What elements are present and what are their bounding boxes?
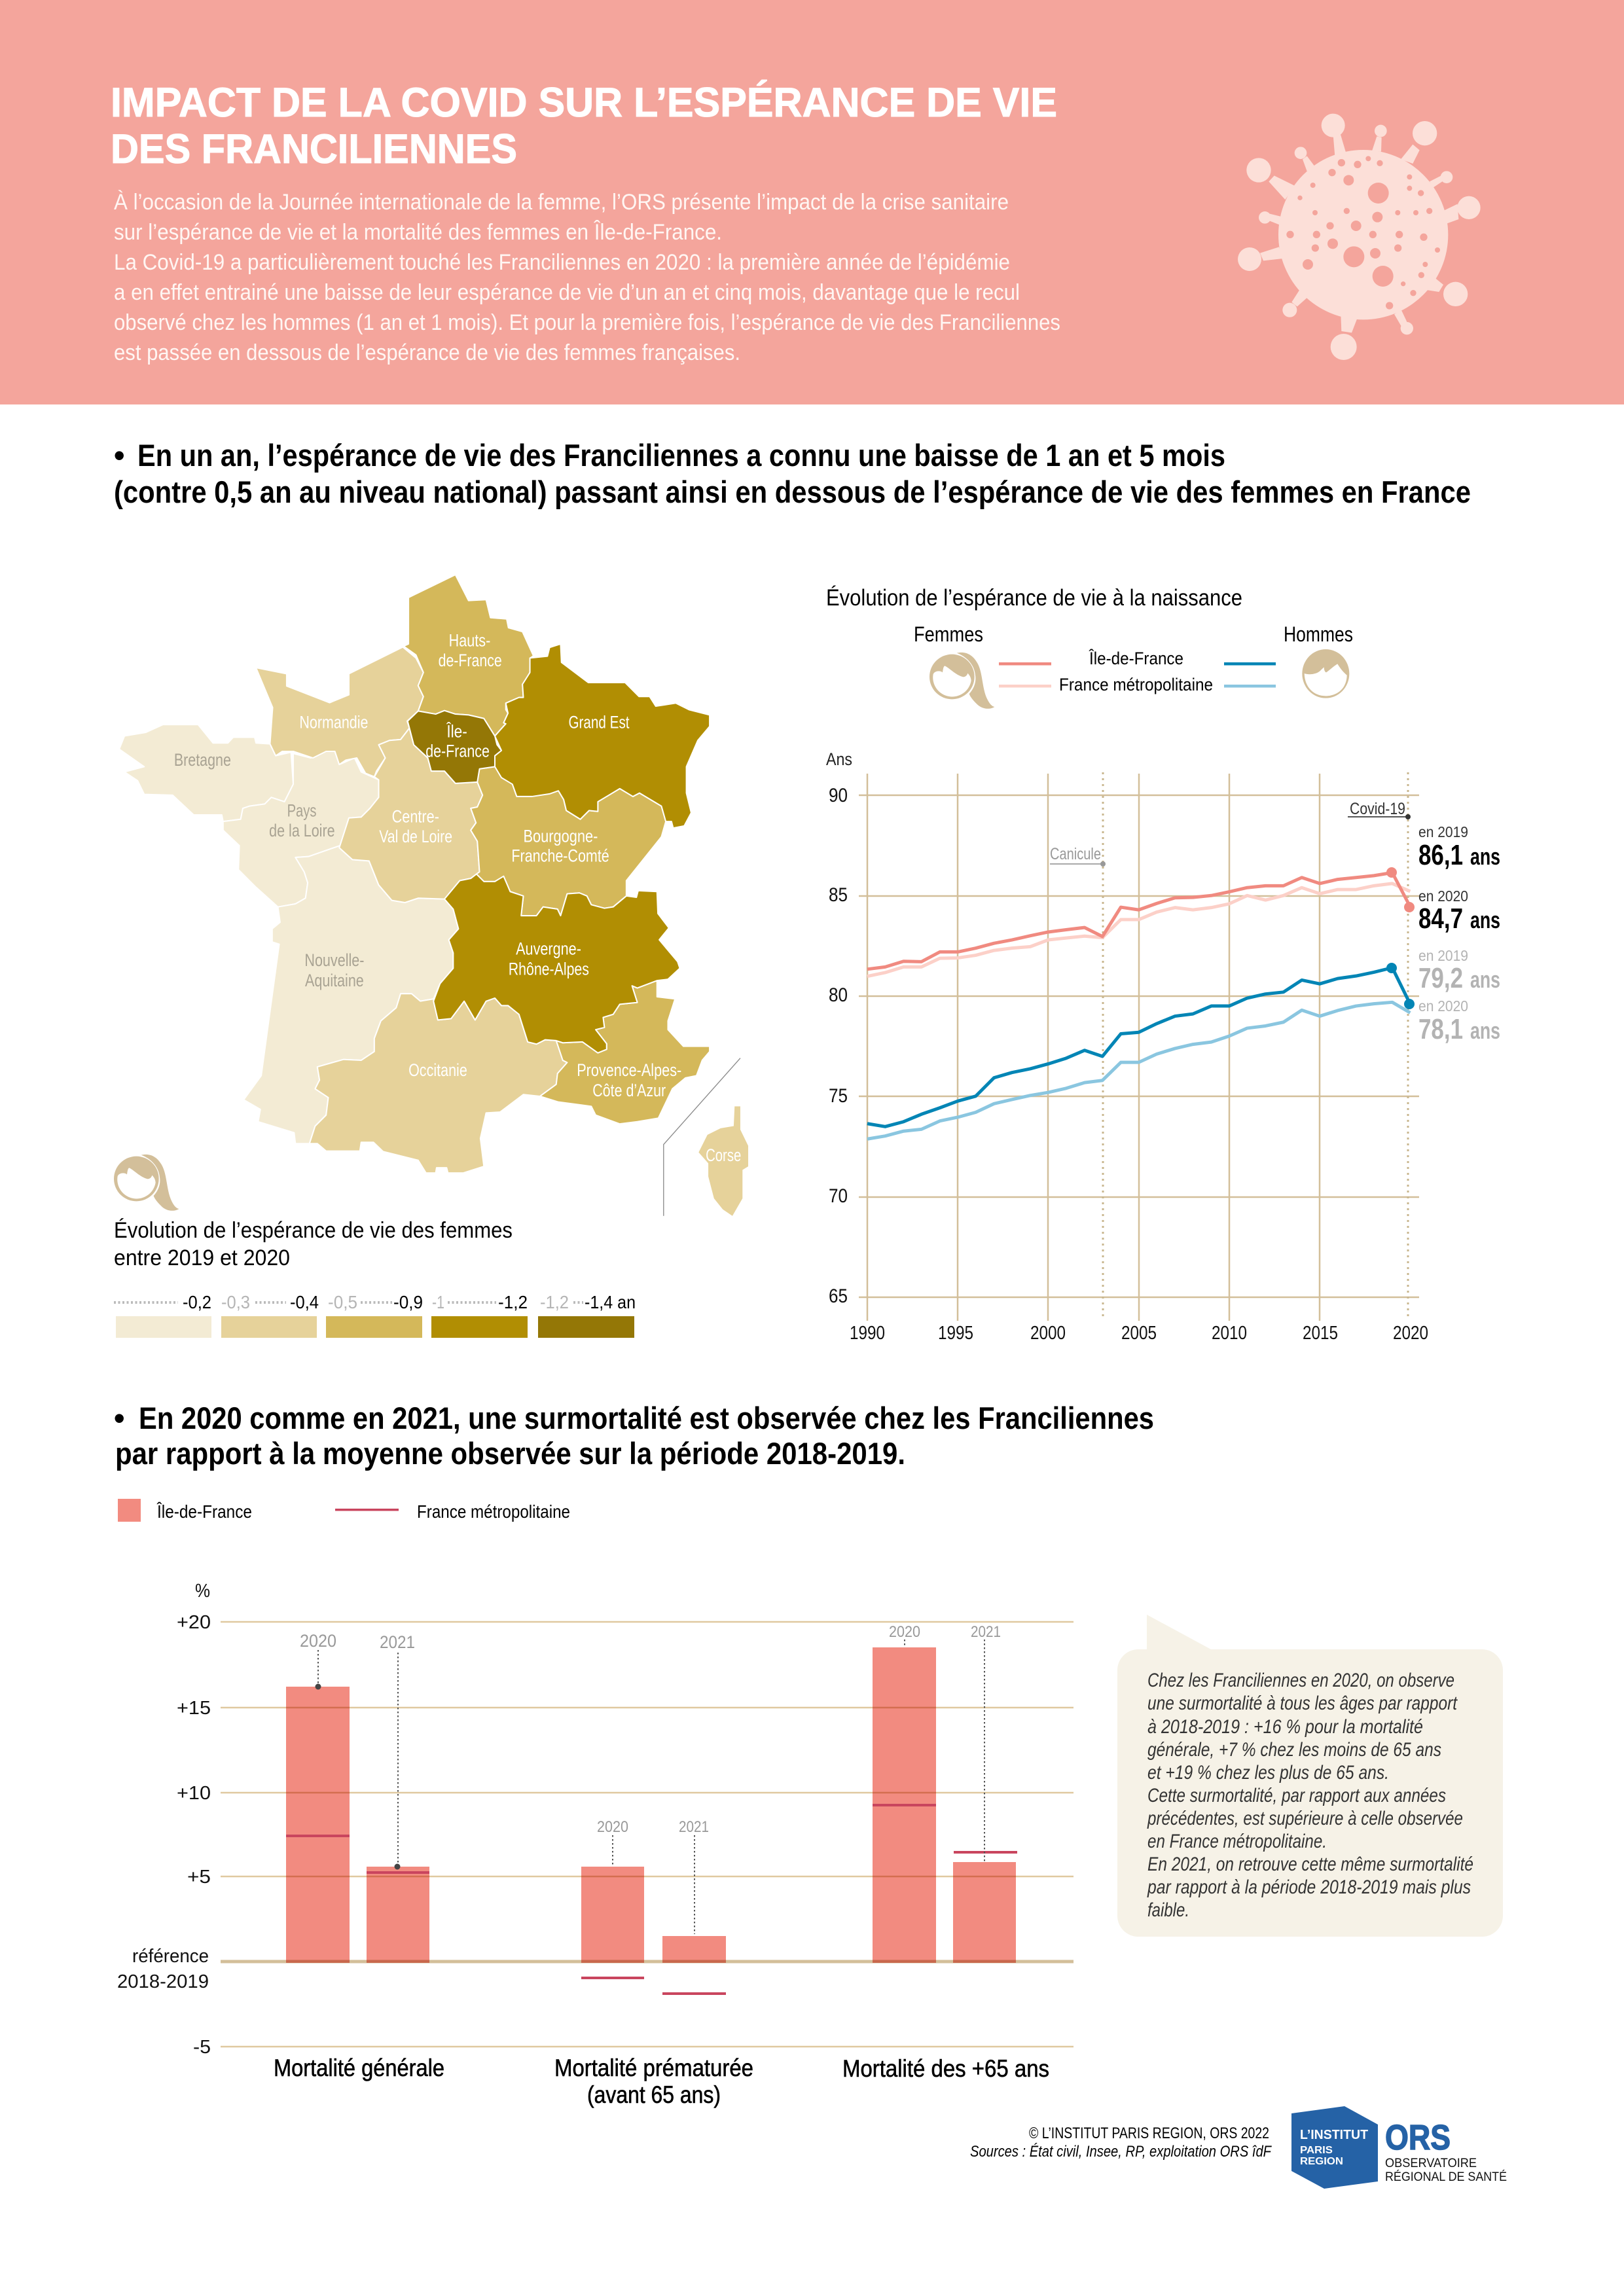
line chart: life expectancy: Ans [826,749,852,769]
callout: commentary: en France métropolitaine. [1147,1831,1327,1852]
category labels: Mortalité des +65 ans [842,2055,1049,2082]
year labels: 2020 [300,1631,336,1651]
legend: line chart: France métropolitaine [1059,675,1213,694]
map: regions of France [119,575,748,1216]
region: Nouvelle-Aquitaine [244,846,458,1143]
axis labels: y: 90 [829,785,848,806]
region: Corse [698,1106,748,1216]
logo: ORS: RÉGIONAL DE SANTÉ [1385,2170,1507,2184]
region labels [174,630,741,1165]
heading: section 2 [114,1401,1154,1471]
data labels: women: 86,1 [1418,839,1463,871]
map legend: classes: -0,5 [328,1292,357,1312]
region: Occitanie [310,994,567,1173]
map legend: classes: -0,3 [221,1292,250,1312]
region: Hauts-de-France [404,575,533,736]
axis labels: x [850,1323,1428,1344]
region labels: Bretagne [174,750,231,770]
callout: commentary [1117,1615,1503,1937]
axis labels: y: 85 [829,884,848,906]
region: Pays de la Loire [223,751,379,907]
year labels: 2020 [889,1623,920,1641]
legend: bar chart [118,1499,570,1522]
region labels: Franche-Comté [511,846,609,866]
map legend: classes: -1,2 [540,1292,569,1312]
data labels: men: en 2020 [1418,997,1468,1014]
region labels: Pays [287,801,316,821]
text block: introduction: est passée en dessous de l’espérance de vie des femmes françaises. [114,340,740,365]
icon: woman [929,653,994,709]
axis labels: -5 [193,2037,211,2058]
heading: section 1: En un an, l’espérance de vie des Franciliennes a connu une baisse de 1 an et 5 mois [137,438,1225,473]
text block: introduction [114,190,1060,365]
title: IMPACT DE LA COVID SUR L’ESPÉRANCE DE VIE [111,80,1057,126]
axis labels: +15 [177,1698,211,1719]
callout: commentary: Chez les Franciliennes en 2020, on observe [1147,1670,1454,1691]
data labels: men [1418,947,1500,1045]
region labels: de-France [439,651,502,670]
data labels: men: 78,1 [1418,1013,1463,1045]
axis labels: x: 2000 [1030,1323,1066,1344]
legend: bar chart: France métropolitaine [417,1501,570,1522]
data labels: women: 84,7 [1418,903,1463,935]
bars: Île-de-France [286,1647,1016,1963]
region labels: Nouvelle- [304,950,364,970]
map legend: classes: -0,9 [393,1292,423,1312]
map legend: title: Évolution de l’espérance de vie des femmes [114,1218,513,1243]
logo: ORS: OBSERVATOIRE [1385,2157,1477,2170]
data labels: men: ans [1470,1017,1500,1044]
year leaders [318,1640,984,1934]
logo: L'Institut Paris Region: REGION [1300,2156,1343,2167]
region: Île-de-France [408,711,501,783]
map legend: classes: -1,4 an [585,1292,636,1312]
region labels: de la Loire [269,821,335,840]
axis labels: y: 75 [829,1085,848,1107]
callout: commentary: générale, +7 % chez les moins de 65 ans [1147,1739,1441,1761]
region: Bourgogne-Franche-Comté [471,766,666,916]
text block: introduction: a en effet entrainé une baisse de leur espérance de vie d’un an et cinq mois, davantage que le recul [114,280,1020,305]
icon: virus [1238,114,1481,360]
callout: commentary: à 2018-2019 : +16 % pour la mortalité [1147,1716,1423,1738]
callout: commentary: faible. [1147,1899,1189,1921]
region labels: Val de Loire [379,827,452,846]
axis labels: y: 80 [829,984,848,1006]
text block: introduction: La Covid-19 a particulièrement touché les Franciliennes en 2020 : la première année de l’épidémie [114,250,1010,275]
heading: section 1: (contre 0,5 an au niveau national) passant ainsi en dessous de l’espérance de vie des femmes en France [114,475,1471,509]
annotation: Canicule: Canicule [1050,845,1101,863]
heading: section 2: En 2020 comme en 2021, une surmortalité est observée chez les Franciliennes [139,1401,1154,1435]
category labels: Mortalité générale [274,2054,444,2081]
logo: L'Institut Paris Region: L’INSTITUT [1300,2128,1368,2142]
region: Grand Est [495,644,710,828]
map legend: title: entre 2019 et 2020 [114,1246,290,1270]
axis labels: x: 2020 [1393,1323,1428,1344]
category labels [274,2054,1049,2108]
map legend: classes [114,1292,636,1338]
region labels: Provence-Alpes- [577,1060,681,1080]
series end points [1386,867,1415,1009]
logo: ORS [1385,2118,1507,2184]
year labels: 2020 [597,1818,628,1836]
data labels: men: 79,2 [1418,962,1463,994]
region: Normandie [256,647,424,777]
region labels: Aquitaine [305,971,364,990]
data labels: women [1418,823,1500,935]
region labels: Bourgogne- [524,827,598,846]
region labels: Rhône-Alpes [509,959,589,978]
region labels: Île- [446,721,467,742]
legend: line chart [914,622,1353,709]
logo: ORS: ORS [1385,2118,1451,2157]
icon: woman (map legend) [114,1155,179,1211]
line chart: life expectancy [826,749,1500,1344]
axis labels: +10 [177,1783,211,1804]
axis labels: y [829,785,848,1307]
region labels: Occitanie [408,1060,467,1080]
axis labels: 2018-2019 [117,1971,209,1992]
data labels: women: ans [1470,906,1500,933]
map legend: title [114,1218,513,1270]
callout: commentary: Cette surmortalité, par rapport aux années [1147,1785,1446,1806]
credits and sources: Sources : État civil, Insee, RP, exploitation ORS îdF [970,2143,1272,2161]
text block: introduction: observé chez les hommes (1 an et 1 mois). Et pour la première fois, l’espérance de vie des Franciliennes [114,310,1060,335]
legend: line chart: Hommes [1284,622,1353,646]
category labels: (avant 65 ans) [587,2081,721,2108]
series lines [867,872,1410,1139]
axis labels: y: 65 [829,1285,848,1307]
axis labels: x: 1990 [850,1323,885,1344]
axis labels: x: 1995 [938,1323,973,1344]
region labels: Grand Est [568,712,630,732]
region labels: Auvergne- [516,939,581,959]
region labels: de-France [425,742,490,761]
heading: section 1: • [114,438,124,473]
heading: section 2: • [114,1401,124,1435]
logo: L'Institut Paris Region: PARIS [1300,2145,1333,2156]
logo: L'Institut Paris Region [1291,2106,1378,2189]
data labels: women: en 2019 [1418,823,1468,840]
credits and sources: © L’INSTITUT PARIS REGION, ORS 2022 [1029,2125,1269,2142]
year labels: 2021 [380,1632,415,1652]
axis labels: x: 2005 [1121,1323,1157,1344]
annotation: Covid-19: Covid-19 [1350,800,1405,818]
callout: commentary: précédentes, est supérieure à celle observée [1147,1808,1463,1829]
panel: header banner [0,0,1624,404]
axis labels: référence [132,1946,209,1967]
text block: introduction: sur l’espérance de vie et la mortalité des femmes en Île-de-France. [114,220,722,245]
region: Provence-Alpes-Côte d'Azur [540,980,710,1124]
heading: line chart title: Évolution de l’espérance de vie à la naissance [826,585,1242,611]
year labels: 2021 [679,1818,709,1836]
title: DES FRANCILIENNES [111,126,517,172]
map legend: classes: -1 [432,1292,444,1312]
region labels: Côte d’Azur [592,1081,666,1100]
data labels: men: ans [1470,966,1500,993]
region labels: Centre- [392,806,439,826]
category labels: Mortalité prématurée [554,2054,753,2081]
axis labels [117,1581,211,2058]
year labels [300,1623,1001,1836]
icon: man [1302,649,1349,698]
axis labels: y: 70 [829,1185,848,1207]
credits and sources [970,2125,1272,2161]
axis labels: +5 [187,1867,211,1888]
map legend: classes: -0,2 [183,1292,211,1312]
data labels: women: ans [1470,843,1500,870]
region labels: Normandie [299,712,368,732]
callout: commentary: une surmortalité à tous les âges par rapport [1147,1693,1458,1714]
region: Centre-Val de Loire [339,728,482,903]
map legend: classes: -1,2 [498,1292,528,1312]
region: Auvergne-Rhône-Alpes [433,874,680,1053]
region labels: Hauts- [449,630,490,650]
markers: France métropolitaine [286,1804,1017,1995]
callout: commentary: et +19 % chez les plus de 65 ans. [1147,1762,1389,1784]
axis labels: x: 2015 [1303,1323,1338,1344]
data labels: women: en 2020 [1418,888,1468,905]
heading: section 1 [114,438,1471,509]
legend: line chart: Femmes [914,622,983,646]
data labels: men: en 2019 [1418,947,1468,964]
legend: line chart: Île-de-France [1089,648,1183,668]
region labels: Corse [706,1145,741,1165]
year labels: 2021 [971,1623,1001,1641]
map legend: classes: -0,4 [290,1292,319,1312]
text block: introduction: À l’occasion de la Journée internationale de la femme, l’ORS présente l’impact de la crise sanitaire [114,190,1009,215]
axis labels: x: 2010 [1212,1323,1247,1344]
axis labels: +20 [177,1612,211,1633]
bar chart: excess mortality [117,1581,1074,2108]
legend: bar chart: Île-de-France [156,1501,252,1522]
heading: section 2: par rapport à la moyenne observée sur la période 2018-2019. [115,1436,905,1471]
axis labels: % [195,1581,210,1602]
callout: commentary: En 2021, on retrouve cette même surmortalité [1147,1854,1473,1875]
title [111,80,1057,172]
region: Bretagne [119,725,293,821]
callout: commentary: par rapport à la période 2018-2019 mais plus [1147,1876,1471,1898]
